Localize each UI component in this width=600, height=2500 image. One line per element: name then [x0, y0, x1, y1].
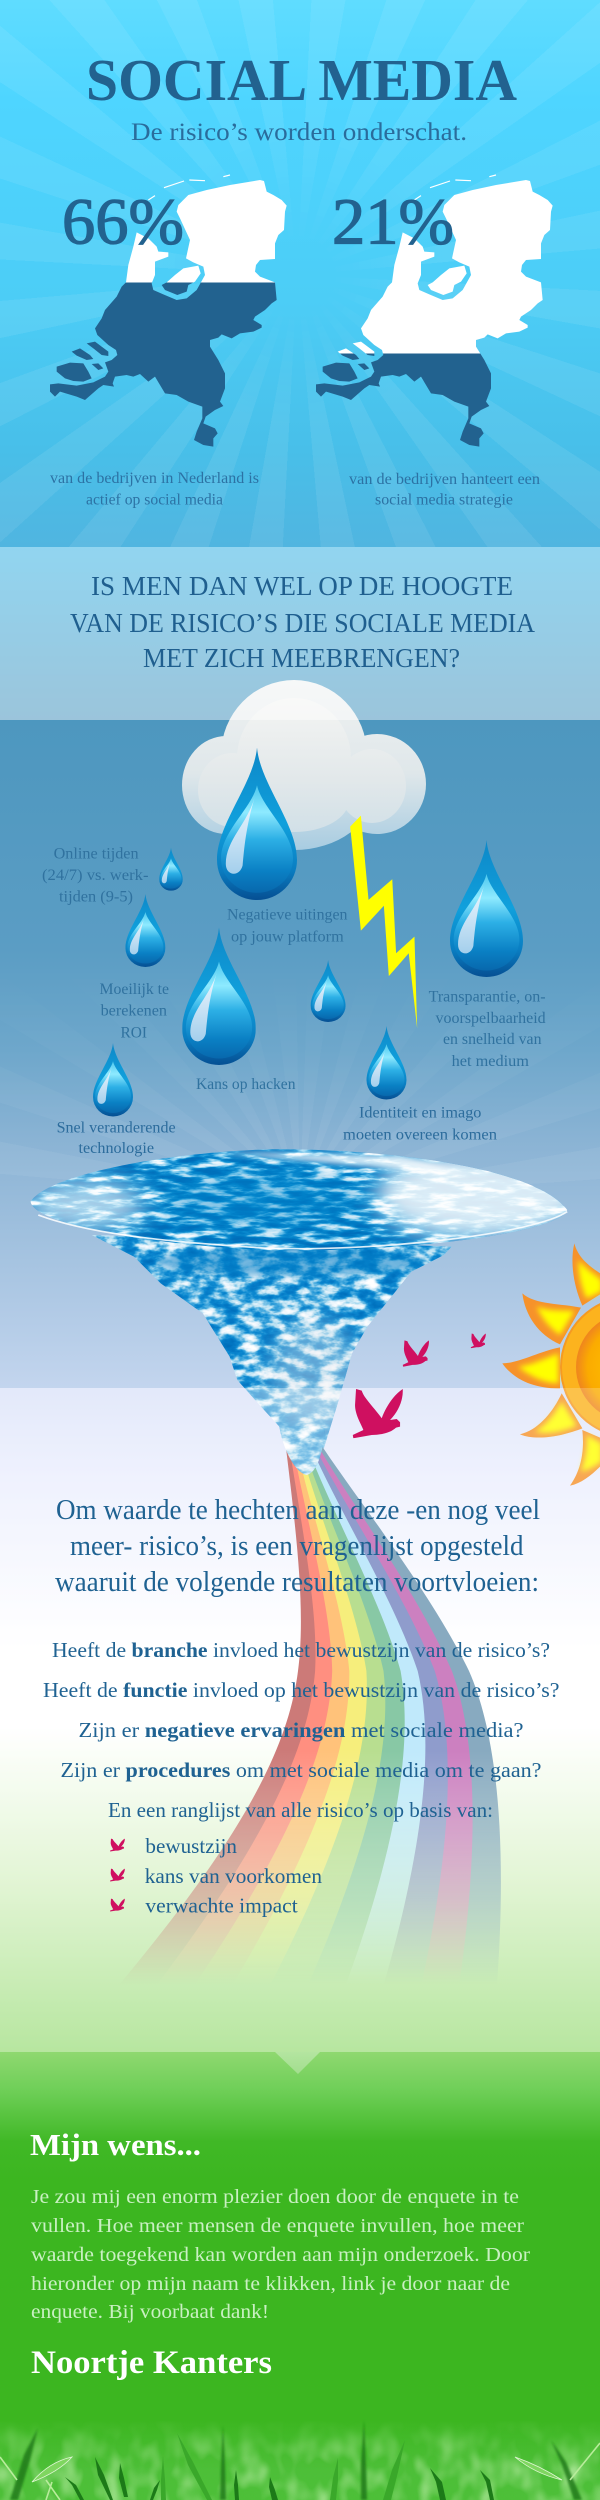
- label: snel veranderende technologie: Snel veranderende: [57, 1119, 176, 1136]
- lower light band overlay: [0, 1388, 600, 2052]
- heading question: VAN DE RISICO’S DIE SOCIALE MEDIA: [70, 608, 535, 638]
- label: snel veranderende technologie: [57, 1119, 176, 1157]
- caption left: actief op social media: [86, 492, 223, 508]
- footer body text: hieronder op mijn naam te klikken, link je door naar de: [31, 2273, 510, 2295]
- background: storm section: [0, 547, 600, 1388]
- label: online tijden: [42, 845, 148, 905]
- result questions: Heeft de branche invloed het bewustzijn van de risico’s?: [52, 1638, 550, 1662]
- caption left: van de bedrijven in Nederland is: [50, 470, 259, 487]
- rainbow: [130, 1447, 501, 1972]
- result questions: Heeft de functie invloed op het bewustzijn van de risico’s?: [43, 1678, 560, 1702]
- list item: kans van voorkomen: kans van voorkomen: [145, 1864, 322, 1888]
- caption right: [349, 471, 540, 508]
- intro paragraph: [55, 1495, 540, 1598]
- label: transparantie: het medium: [452, 1053, 529, 1070]
- grass: [0, 2420, 600, 2500]
- list item: verwachte impact: verwachte impact: [145, 1894, 298, 1918]
- background: rays in the top section: [0, 0, 600, 547]
- subtitle: De risico’s worden onderschat.: [131, 119, 467, 146]
- result questions: Zijn er procedures om met sociale media om te gaan?: [60, 1758, 542, 1782]
- footer body text: Je zou mij een enorm plezier doen door de enquete in te: [31, 2186, 519, 2208]
- map of the Netherlands, 66 percent filled: [50, 175, 287, 447]
- background: faint rays behind the funnel: [0, 960, 600, 1200]
- risk labels: [42, 845, 546, 1157]
- title: SOCIAL MEDIA: [86, 47, 517, 113]
- footer body text: enquete. Bij voorbaat dank!: [31, 2301, 269, 2323]
- label: online tijden: tijden (9-5): [59, 888, 133, 905]
- funnel top disc: [30, 1149, 568, 1250]
- icon: birds: [353, 1334, 486, 1438]
- result questions: Zijn er negatieve ervaringen met sociale media?: [78, 1718, 524, 1742]
- caption left: [50, 470, 259, 508]
- footer body text: vullen. Hoe meer mensen de enquete invullen, hoe meer: [31, 2215, 524, 2237]
- label: negatieve uitingen: op jouw platform: [231, 928, 344, 945]
- intro paragraph: Om waarde te hechten aan deze -en nog veel: [56, 1495, 540, 1526]
- label: kans op hacken: Kans op hacken: [196, 1076, 296, 1093]
- label: moeilijk te berekenen ROI: berekenen: [101, 1003, 167, 1020]
- list item: bewustzijn: bewustzijn: [145, 1834, 237, 1858]
- footer body text: waarde toegekend kan worden aan mijn onderzoek. Door: [31, 2244, 530, 2266]
- arrow: triangle pointing to the footer: [275, 2052, 320, 2074]
- background: green footer section: [0, 2052, 600, 2500]
- heading question: [70, 571, 535, 673]
- author name: Noortje Kanters: [31, 2345, 272, 2381]
- footer body text: [31, 2186, 530, 2323]
- label: moeilijk te berekenen ROI: Moeilijk te: [100, 981, 169, 998]
- label: moeilijk te berekenen ROI: [100, 981, 169, 1041]
- label: moeilijk te berekenen ROI: ROI: [120, 1024, 147, 1041]
- label: online tijden: (24/7) vs. werk-: [42, 867, 148, 884]
- panel: 66 percent statistic: [50, 175, 287, 508]
- panel: question band: [0, 547, 600, 720]
- heading: mijn wens: Mijn wens...: [30, 2127, 201, 2162]
- label: transparantie: en snelheid van: [443, 1031, 542, 1048]
- label: transparantie: voorspelbaarheid: [436, 1010, 546, 1027]
- number 66%: 66%: [62, 186, 184, 258]
- label: negatieve uitingen: Negatieve uitingen: [227, 907, 348, 924]
- number 21%: 21%: [332, 186, 454, 258]
- caption right: social media strategie: [375, 492, 513, 508]
- label: transparantie: [429, 988, 546, 1070]
- funnel body: [92, 1235, 452, 1449]
- caption right: van de bedrijven hanteert een: [349, 471, 540, 488]
- icon: sun: [502, 1244, 600, 1486]
- label: transparantie: Transparantie, on-: [429, 988, 546, 1005]
- panel: 21 percent statistic: [316, 175, 553, 508]
- heading question: IS MEN DAN WEL OP DE HOOGTE: [91, 571, 513, 601]
- result questions: [43, 1638, 560, 1822]
- sun disc: [560, 1296, 600, 1438]
- icon: lightning bolt: [350, 816, 417, 1028]
- ranking list with bird bullets: [110, 1834, 322, 1918]
- label: online tijden: Online tijden: [54, 845, 139, 862]
- heading question: MET ZICH MEEBRENGEN?: [143, 643, 460, 673]
- map of the Netherlands, 21 percent filled: [316, 175, 553, 447]
- icon: water funnel: [30, 1149, 568, 1449]
- icon: cloud: [182, 680, 426, 850]
- background: light to green section: [0, 1388, 600, 2052]
- label: negatieve uitingen: [227, 907, 348, 945]
- intro paragraph: waaruit de volgende resultaten voortvloeien:: [55, 1567, 539, 1598]
- background: blue top section: [0, 0, 600, 547]
- result questions: En een ranglijst van alle risico’s op basis van:: [108, 1798, 493, 1822]
- sun rays: [502, 1243, 600, 1486]
- label: identiteit en imago: Identiteit en imago: [359, 1104, 482, 1121]
- intro paragraph: meer- risico’s, is een vragenlijst opgesteld: [70, 1531, 524, 1562]
- icon: water drops: [93, 748, 523, 1116]
- label: identiteit en imago: [343, 1104, 497, 1143]
- label: snel veranderende technologie: technologie: [78, 1140, 154, 1157]
- label: identiteit en imago: moeten overeen komen: [343, 1126, 497, 1143]
- funnel tip over the rainbow: [279, 1426, 326, 1475]
